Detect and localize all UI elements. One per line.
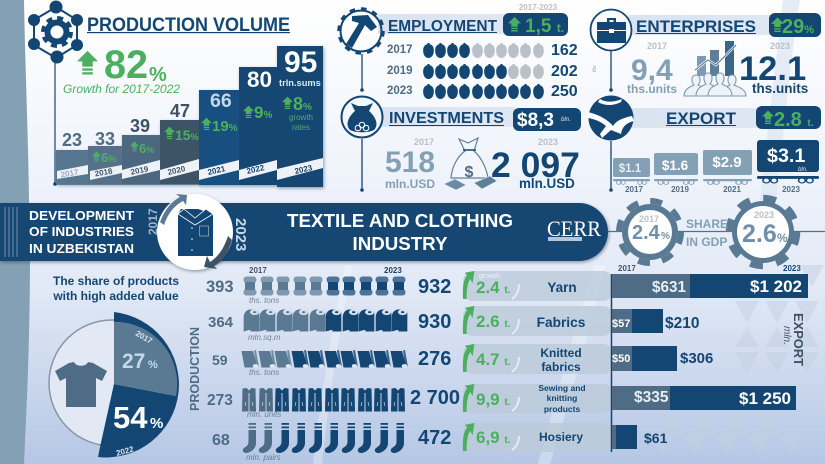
pictogram rows: employment by year: 250 (551, 83, 578, 100)
figure: 2023 enterprises: 12.1 (739, 50, 806, 88)
bar chart: production by year: 2017 (60, 167, 80, 180)
bar chart: production by year: 66 (210, 90, 232, 112)
label: export mln: EXPORT (791, 313, 805, 366)
figure: 2023 enterprises: ths.units (752, 81, 808, 96)
figure: 2023 investments: 2023 (538, 137, 558, 147)
bar: hosiery: $61 (644, 430, 668, 446)
row: hosiery: 68 (212, 432, 230, 449)
bar chart: production by year: 47 (170, 101, 190, 121)
legend: years (249, 266, 402, 275)
wagons chart: export by year (613, 140, 819, 194)
label: export mln (781, 313, 805, 366)
heading band: export (632, 108, 767, 128)
banner: textile and clothing industry (0, 194, 608, 270)
gear: 2017 share (619, 201, 681, 263)
row: hosiery: 472 (418, 427, 451, 449)
wagons chart: export by year: bln. (798, 167, 808, 173)
bar chart: production by year: 2019 (130, 164, 150, 177)
row: yarn (206, 276, 451, 305)
bar chart: export by product (612, 264, 808, 452)
wagons chart: export by year: 2023 (782, 185, 800, 194)
badge: 8.3 billion: $8,3 (517, 110, 554, 131)
panel: growth pills: knitting (547, 393, 577, 403)
chart: pie with shirt icon: % (150, 415, 163, 432)
bar chart: production by year: 6% (101, 150, 116, 165)
panel: investments (342, 96, 581, 192)
row: knitted fabrics: ths. tons (249, 368, 279, 377)
text: development of industries in Uzbekistan: IN UZBEKISTAN (29, 242, 134, 256)
chart: pie with shirt icon: 2022 (115, 444, 135, 458)
pictogram rows: employment by year: 202 (551, 63, 578, 80)
gear: 2017 share: % (661, 231, 670, 242)
bar: fabrics (612, 309, 699, 333)
bar chart: production by year: 2020 (167, 164, 187, 177)
panel: growth pills: Fabrics (537, 315, 586, 330)
bar chart: export by product: 2017 (618, 264, 636, 273)
note: units: ths (592, 65, 598, 72)
bar: yarn: $631 (652, 279, 687, 296)
chart: pie with shirt icon: 2017 (134, 329, 154, 346)
heading band: export: EXPORT (666, 109, 737, 128)
wagons chart: export by year: 2021 (723, 185, 741, 194)
figure: 2017 investments (385, 137, 435, 191)
bar: sewing and knitting products: $1 250 (739, 389, 791, 408)
bar chart: production by year: 2021 (207, 164, 227, 177)
panel: growth pills: Knitted (540, 346, 582, 360)
gear: 2023 share: 2023 (754, 210, 774, 220)
badge: 1.5 times: 1,5 t. (525, 16, 564, 37)
badge: 8.3 billion: bln. (561, 117, 571, 123)
figure: 2017 investments: 518 (385, 146, 435, 179)
pictogram rows: employment by year: 2023 (387, 85, 413, 97)
icon: hammer in gear (339, 9, 383, 92)
bar: sewing and knitting products (612, 386, 796, 410)
heading: share of products: with high added value (52, 289, 179, 303)
heading: share of products (52, 274, 179, 303)
icon: rising bars with people (684, 41, 746, 96)
row: knitted fabrics (212, 348, 451, 377)
icon: t-shirt (55, 362, 107, 407)
row: knitted fabrics: 59 (212, 352, 228, 368)
row: hosiery: mln. pairs (246, 453, 281, 462)
bar chart: production by year: 6% (139, 141, 154, 156)
label: production: PRODUCTION (188, 327, 202, 411)
figure: 2023 enterprises: 2023 (770, 41, 790, 51)
panel: share of high added value products (49, 274, 179, 458)
panel: growth pills (463, 271, 613, 452)
bar: knitted fabrics: $306 (680, 350, 713, 367)
bar chart: production by year: rates (292, 123, 310, 132)
panel: export triangle pattern (650, 265, 824, 454)
bar chart: production by year: 9% (254, 103, 272, 122)
wagons chart: export by year: 2019 (671, 185, 689, 194)
bar chart: production by year: 2022 (246, 163, 266, 176)
gear: 2017 share: 2.4 (632, 222, 661, 244)
figure: 2017 enterprises: ths.units (627, 82, 677, 96)
panel: growth pills: Yarn (547, 280, 577, 295)
panel: growth pills: 6,9 t. (476, 428, 511, 447)
logo: CERR: CERR (547, 216, 601, 241)
panel: growth pills: products (544, 404, 580, 414)
bar chart: export by product: 2023 (783, 264, 801, 273)
badge: 29 percent: 29% (782, 16, 814, 38)
label: 2017 to 2023: 2023 (232, 218, 249, 251)
figure: 2023 investments: 2 097 (491, 145, 580, 185)
panel: share in GDP (608, 198, 825, 266)
bar chart: production by year: 95 (284, 46, 317, 79)
heading: production volume: PRODUCTION VOLUME (87, 15, 290, 36)
label: export mln: mln. (781, 326, 792, 345)
icon: money bag with banknotes (444, 138, 497, 190)
text: development of industries in Uzbekistan: DEVELOPMENT (29, 209, 134, 223)
bar chart: production by year: growth (289, 113, 313, 122)
bar chart: production by year: 19% (212, 118, 238, 135)
icon: globe with plane (588, 96, 634, 192)
row: fabrics: mln.sq.m (248, 333, 281, 342)
figure: 2017 investments: 2017 (414, 137, 434, 147)
panel: growth pills: Sewing and (538, 383, 586, 393)
panel: employment (339, 3, 578, 100)
row: yarn: 932 (418, 276, 451, 298)
figure: 2017 enterprises: 9,4 (631, 54, 673, 87)
badge: 8.3 billion (513, 108, 581, 131)
title: textile and clothing industry (287, 211, 513, 254)
title: textile and clothing industry: INDUSTRY (352, 234, 448, 254)
figure: 2017 enterprises: 2017 (647, 41, 667, 51)
gear: 2023 share: % (777, 231, 788, 245)
badge: 29 percent (769, 13, 821, 38)
bar: sewing and knitting products: $335 (634, 389, 669, 406)
badge: 1.5 times (503, 3, 568, 37)
icon: money bag with banknotes: $ (465, 164, 474, 181)
row: sewing and knitting products: 2 700 (410, 387, 460, 409)
figure: 2017 investments: mln.USD (385, 177, 435, 191)
heading: share of products: The share of products (53, 274, 179, 288)
gear: 2023 share: 2.6 (742, 220, 777, 248)
row: sewing and knitting products: 273 (207, 392, 233, 409)
panel: export (588, 96, 821, 194)
bar: knitted fabrics (612, 346, 713, 371)
heading band: investments: INVESTMENTS (389, 110, 504, 127)
callout: 82% growth (63, 43, 180, 96)
panel: growth pills: 2.6 t. (476, 312, 511, 331)
icon: gear in hexagon network (28, 0, 320, 186)
bar chart: production by year: 8% (293, 94, 312, 114)
bar chart: production by year: 80 (247, 67, 272, 92)
bar chart: production by year: 33 (95, 129, 115, 149)
badge: 2.8 times: 2.8 t. (774, 109, 814, 131)
text: share in GDP: SHARE (686, 217, 728, 231)
title: textile and clothing industry: TEXTILE AND CLOTHING (287, 211, 513, 231)
legend: years: 2023 (384, 266, 402, 275)
pictogram rows: employment by year (387, 42, 578, 100)
bar: hosiery (612, 425, 668, 449)
pictogram rows: employment by year: 2019 (387, 65, 413, 77)
pictogram rows: employment by year: 2017 (387, 44, 413, 56)
bar: knitted fabrics: $50 (612, 353, 630, 365)
text: share in GDP (686, 217, 728, 249)
callout: 82% growth: 82 (104, 43, 148, 87)
panel: enterprises (590, 10, 821, 96)
text: development of industries in Uzbekistan: OF INDUSTRIES (29, 225, 134, 239)
heading band: employment: EMPLOYMENT (388, 18, 497, 35)
row: fabrics: 930 (418, 311, 451, 333)
text: development of industries in Uzbekistan (29, 209, 134, 256)
bar: yarn: $1 202 (750, 277, 802, 296)
row: fabrics (208, 309, 451, 342)
wagons chart: export by year: $3.1 (767, 145, 805, 167)
row: yarn: ths. tons (249, 296, 279, 305)
callout: 82% growth: % (149, 64, 167, 86)
bar chart: production by year (56, 46, 323, 187)
gear: 2023 share (729, 198, 797, 266)
bar chart: production by year: 15% (175, 127, 199, 143)
chart: pie with shirt icon: 27 (122, 350, 145, 373)
bar chart: production by year: 39 (130, 116, 150, 136)
badge: 2.8 times (756, 106, 821, 131)
bar: fabrics: $57 (612, 318, 630, 330)
bar: yarn (612, 274, 808, 298)
label: 2017 to 2023 (146, 208, 249, 251)
badge: 1.5 times: 2017-2023 (519, 3, 558, 12)
row: yarn: 393 (206, 278, 234, 296)
panel: growth pills: growth (479, 273, 500, 280)
heading band: enterprises: ENTERPRISES (636, 17, 756, 36)
wagons chart: export by year: 2017 (625, 185, 643, 194)
panel: production pictograms (206, 266, 460, 462)
legend: years: 2017 (249, 266, 267, 275)
bar chart: production by year: trln.sums (279, 78, 321, 88)
row: sewing and knitting products (207, 387, 460, 419)
wagons chart: export by year: $1.6 (662, 158, 689, 173)
icon: money bag in circle (342, 96, 382, 192)
bar chart: production by year: 23 (62, 130, 82, 150)
pictogram rows: employment by year: 162 (551, 42, 578, 59)
panel: growth pills: fabrics (541, 360, 581, 374)
row: fabrics: 364 (208, 314, 234, 331)
panel: growth pills: 9,9 t. (476, 390, 511, 409)
row: sewing and knitting products: mln. units (247, 410, 281, 419)
bar: fabrics: $210 (665, 315, 699, 332)
bar chart: production by year: 2018 (94, 166, 114, 179)
figure: 2023 investments: mln.USD (519, 176, 575, 191)
chart: pie with shirt icon: 54 (113, 400, 148, 435)
figure: 2023 enterprises (739, 41, 808, 96)
row: hosiery (212, 423, 451, 462)
panel: growth pills: Hosiery (539, 430, 583, 444)
figure: 2017 enterprises (627, 41, 677, 96)
label: 2017 to 2023: 2017 (146, 208, 160, 235)
wagons chart: export by year: $1.1 (619, 163, 642, 175)
icon: shirt in circle with cycle arrows (157, 194, 233, 270)
panel: growth pills: 2.4 t. (476, 278, 511, 297)
icon: briefcase (590, 10, 632, 92)
panel: growth pills: 4.7 t. (476, 350, 511, 369)
text: share in GDP: IN GDP (686, 235, 727, 249)
wagons chart: export by year: $2.9 (712, 154, 742, 171)
row: knitted fabrics: 276 (418, 348, 451, 370)
panel: production volume (28, 0, 323, 187)
bar chart: production by year: 2023 (294, 163, 314, 176)
callout: 82% growth: Growth for 2017-2022 (63, 82, 180, 96)
chart: pie with shirt icon (49, 312, 179, 458)
chart: pie with shirt icon: % (148, 359, 158, 371)
gear: 2017 share: 2017 (639, 214, 659, 224)
